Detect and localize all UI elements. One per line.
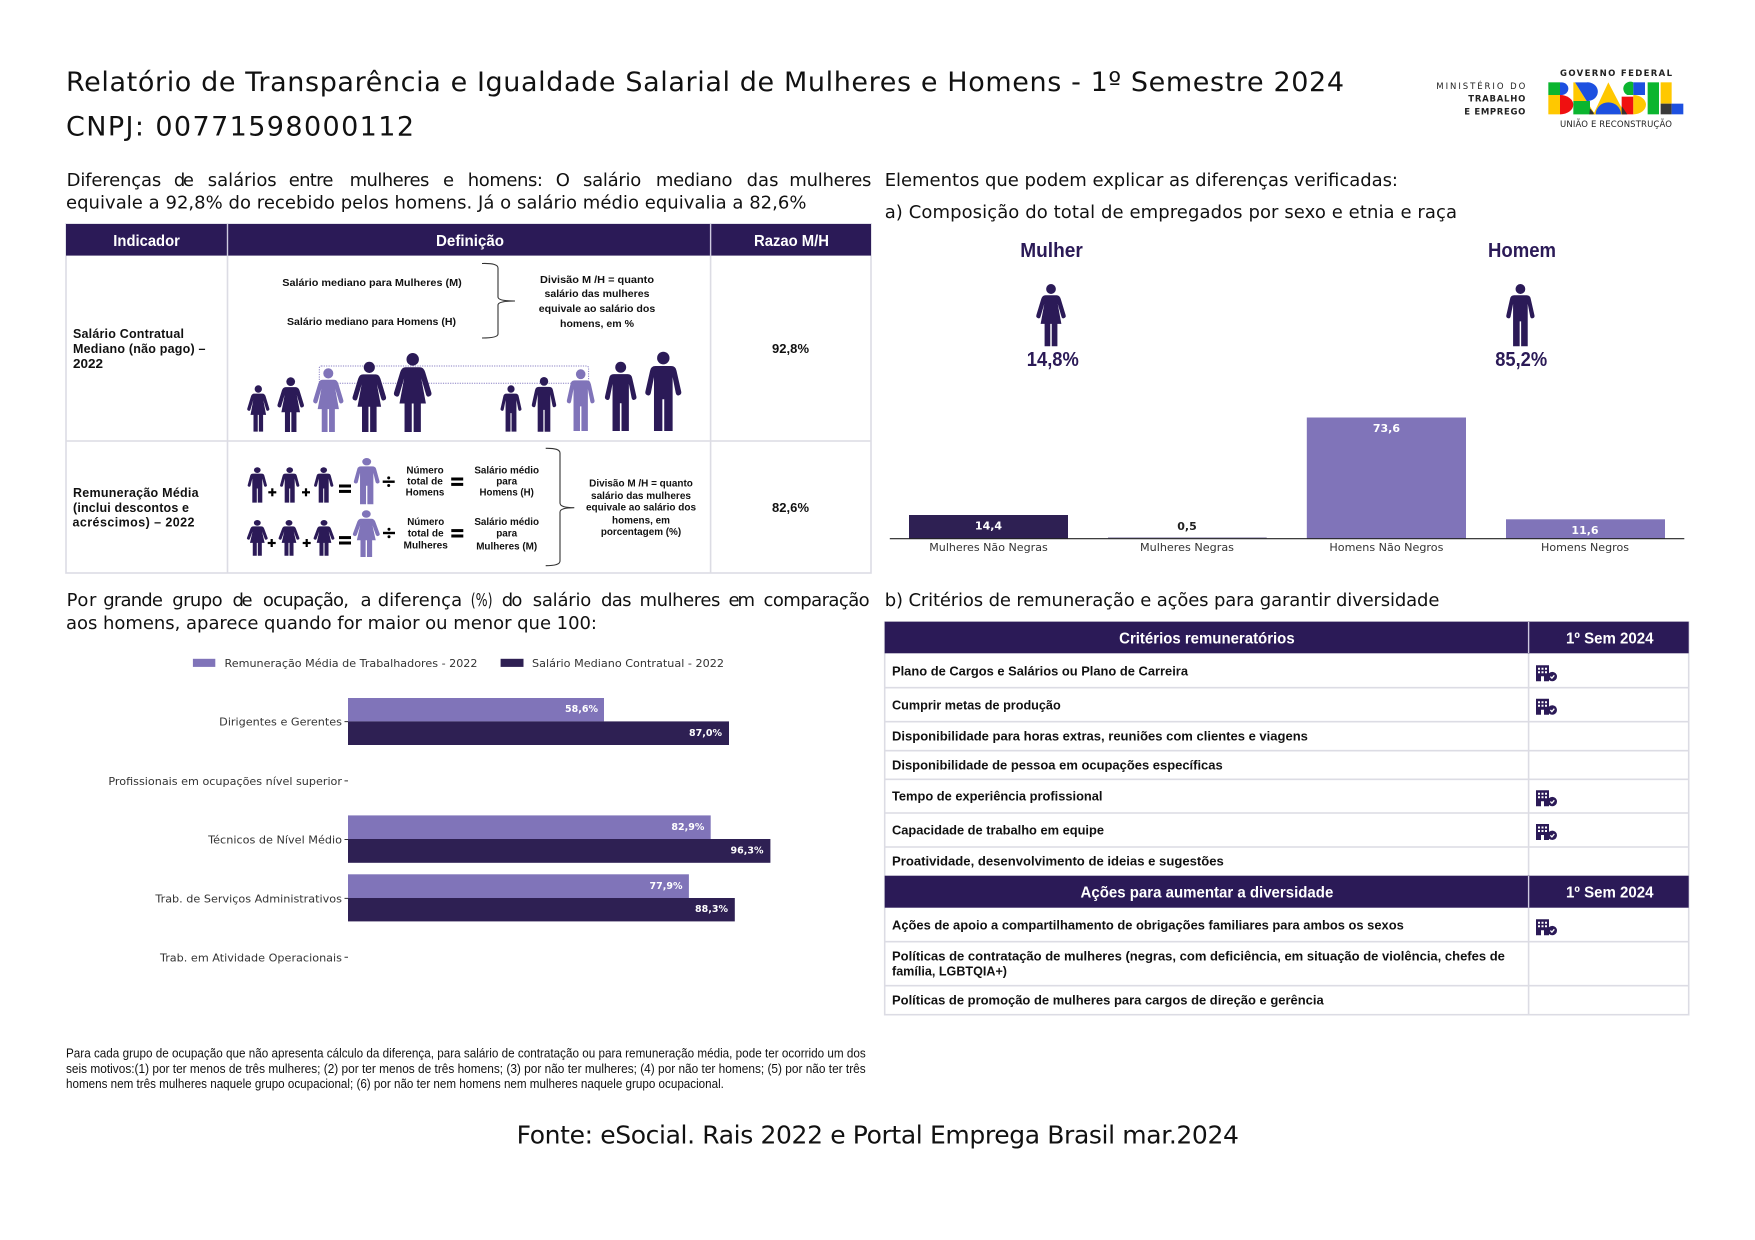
chart: employees by sex and race (890, 418, 1684, 554)
intro paragraph: salary differences: salário (583, 170, 641, 191)
median formula text (282, 277, 462, 328)
man share: Homem (1488, 240, 1556, 262)
row label: contract salary (73, 327, 206, 371)
government mark (1548, 69, 1683, 130)
average division explanation: homens, em (612, 514, 670, 526)
occupation paragraph: a (360, 590, 372, 611)
occupation paragraph: grande (103, 590, 163, 611)
bars: Trab. de Serviços Administrativos: 88,3% (695, 904, 728, 915)
table frame (66, 224, 871, 573)
median formula text: Salário mediano para Homens (H) (287, 316, 456, 328)
diversity rows: Políticas de promoção de mulheres para cargos de direção e gerência (892, 994, 1325, 1008)
row label: contract salary: Mediano (não pago) – (73, 342, 206, 356)
bars: Técnicos de Nível Médio: 96,3% (731, 846, 764, 857)
criteria rows: Cumprir metas de produção (892, 699, 1061, 713)
bar: Homens Negros: Homens Negros (1541, 541, 1629, 554)
occupation paragraph: Por (67, 590, 97, 611)
category labels: Técnicos de Nível Médio (207, 834, 342, 846)
formula: men average (248, 458, 539, 504)
category labels (108, 716, 348, 964)
criteria rows (892, 665, 1308, 869)
table header (66, 224, 871, 256)
bar: Mulheres Não Negras: Mulheres Não Negras (929, 541, 1048, 554)
table header: Razao M/H (754, 233, 829, 250)
median division explanation: homens, em % (560, 318, 635, 330)
median division explanation (539, 274, 655, 330)
footnote: homens nem três mulheres naquele grupo ocupacional; (6) por não ter nem homens nem mulheres naquele grupo ocupacional. (66, 1077, 724, 1091)
page title: Relatório de Transparência e Igualdade Salarial de Mulheres e Homens - 1º Semestre 2024 (66, 67, 1344, 98)
ratio values: 92,8% (772, 341, 809, 356)
bracket: average (546, 448, 574, 566)
intro paragraph: salary differences: entre (289, 170, 334, 191)
formula: women average: Salário médio (474, 516, 539, 528)
bar: Homens Negros (1506, 519, 1665, 554)
diversity rows: Ações de apoio a compartilhamento de obrigações familiares para ambos os sexos (892, 919, 1404, 933)
criteria rows: Disponibilidade para horas extras, reuniões com clientes e viagens (892, 730, 1308, 744)
footnote: seis motivos:(1) por ter menos de três mulheres; (2) por ter menos de três homens; (3) por não ter mulheres; (4) por não ter homens; (5) por não ter três (66, 1062, 866, 1076)
section heading a: a) Composição do total de empregados por sexo e etnia e raça (885, 202, 1457, 223)
category labels: Profissionais em ocupações nível superior (108, 775, 342, 788)
intro paragraph: salary differences (66, 170, 871, 214)
category labels: Dirigentes e Gerentes (219, 716, 342, 729)
criteria rows: Disponibilidade de pessoa em ocupações específicas (892, 759, 1223, 773)
panel: criteria table (885, 622, 1689, 1015)
formula: women average: Mulheres (M) (476, 540, 537, 552)
bar: Mulheres Negras: Mulheres Negras (1140, 541, 1234, 554)
bar: Mulheres Não Negras (909, 515, 1068, 554)
icons: women sorted by salary (247, 353, 432, 432)
ministry name (1436, 80, 1526, 117)
bars: Dirigentes e Gerentes (348, 698, 729, 745)
man share: 85,2% (1495, 349, 1547, 371)
header: criteria (885, 622, 1689, 653)
formula: women average: Número (407, 516, 444, 528)
intro paragraph: salary differences: mulheres (789, 170, 871, 191)
page title (66, 67, 1344, 142)
table header: Indicador (113, 233, 180, 250)
median division explanation: salário das mulheres (544, 288, 650, 300)
median formula text: Salário mediano para Mulheres (M) (282, 277, 462, 289)
header: diversity actions: Ações para aumentar a diversidade (1080, 884, 1333, 901)
bar: Homens Não Negros: 73,6 (1373, 422, 1400, 435)
bracket: median (482, 263, 515, 338)
bar: Mulheres Não Negras: 14,4 (975, 519, 1002, 532)
intro paragraph: salary differences: equivale a 92,8% do recebido pelos homens. Já o salário médio equivalia a 82,6% (66, 193, 806, 214)
formula: men average: Número (406, 464, 444, 476)
occupation paragraph: em (728, 590, 755, 611)
bar: Homens Não Negros (1307, 418, 1466, 554)
intro paragraph: salary differences: salários (208, 170, 277, 191)
occupation paragraph: aos homens, aparece quando for maior ou menor que 100: (66, 613, 597, 634)
bar: Homens Não Negros: Homens Não Negros (1329, 541, 1444, 554)
formula: men average: Homens (H) (480, 487, 534, 499)
intro paragraph: salary differences: mediano (656, 170, 732, 191)
median division explanation: equivale ao salário dos (539, 303, 655, 315)
logo: ministry and government (1436, 69, 1683, 130)
row label: average pay: (inclui descontos e (73, 501, 189, 515)
bars: Dirigentes e Gerentes: 58,6% (565, 704, 598, 715)
icons: criteria adopted (1536, 665, 1557, 840)
average division explanation: equivale ao salário dos (586, 502, 696, 514)
footnote (66, 1047, 866, 1091)
criteria rows: Capacidade de trabalho em equipe (892, 824, 1104, 838)
average division explanation: salário das mulheres (591, 490, 691, 502)
woman share: 14,8% (1027, 349, 1079, 371)
header: diversity actions (885, 876, 1689, 908)
diversity rows: família, LGBTQIA+) (892, 965, 1007, 979)
category labels: Trab. em Atividade Operacionais (159, 951, 342, 964)
footnote: Para cada grupo de ocupação que não apresenta cálculo da diferença, para salário de contratação ou para remuneração média, pode ter ocorrido um dos (66, 1047, 866, 1061)
bars: Trab. de Serviços Administrativos (348, 874, 735, 921)
panel: gender composition (1020, 240, 1556, 371)
bars: Dirigentes e Gerentes: 87,0% (689, 728, 722, 739)
bar: Homens Negros: 11,6 (1571, 524, 1599, 537)
occupation paragraph: das (601, 590, 632, 611)
occupation paragraph: mulheres (640, 590, 720, 611)
section heading b: b) Critérios de remuneração e ações para garantir diversidade (885, 590, 1439, 611)
intro paragraph: salary differences: Diferenças (67, 170, 161, 191)
average division explanation (586, 478, 696, 538)
criteria rows: Tempo de experiência profissional (892, 790, 1102, 804)
header: diversity actions: 1º Sem 2024 (1566, 884, 1654, 901)
row label: contract salary: 2022 (73, 357, 103, 371)
right column intro heading: Elementos que podem explicar as diferenças verificadas: (885, 170, 1398, 191)
diversity rows: Políticas de contratação de mulheres (negras, com deficiência, em situação de violência, chefes de (892, 950, 1505, 964)
panel: indicator table (66, 224, 871, 573)
formula: women average: Mulheres (404, 539, 448, 551)
government mark: UNIÃO E RECONSTRUÇÃO (1560, 119, 1672, 130)
ratio values: 82,6% (772, 500, 809, 515)
legend: Salário Mediano Contratual - 2022 (532, 657, 724, 670)
bar: Mulheres Negras (1108, 520, 1267, 554)
average division explanation: Divisão M /H = quanto (589, 478, 693, 490)
woman share (1020, 240, 1083, 371)
category labels: Trab. de Serviços Administrativos (154, 892, 342, 905)
criteria rows: Proatividade, desenvolvimento de ideias e sugestões (892, 855, 1224, 869)
row label: contract salary: Salário Contratual (73, 327, 184, 341)
formula: women average: para (496, 528, 517, 540)
ratio values (772, 341, 809, 515)
formula: men average: Homens (406, 487, 444, 499)
header: criteria: 1º Sem 2024 (1566, 630, 1654, 647)
icon: action adopted (1536, 919, 1557, 935)
legend (193, 657, 724, 670)
legend: Remuneração Média de Trabalhadores - 2022 (224, 657, 478, 670)
occupation paragraph: do (502, 590, 522, 611)
man share (1488, 240, 1556, 371)
occupation paragraph: de (232, 590, 253, 611)
occupation paragraph: ocupação, (263, 590, 349, 611)
woman share: Mulher (1020, 240, 1083, 262)
occupation paragraph: salário (533, 590, 591, 611)
formula: men average: total de (407, 476, 443, 488)
occupation paragraph: grupo (172, 590, 223, 611)
intro paragraph: salary differences: O (556, 170, 570, 191)
formula: women average: total de (408, 528, 444, 540)
bars: Trab. de Serviços Administrativos: 77,9% (650, 881, 683, 892)
row label: average pay: acréscimos) – 2022 (72, 516, 195, 530)
occupation paragraph: diferença (378, 590, 462, 611)
formula: men average: para (496, 476, 517, 488)
median division explanation: Divisão M /H = quanto (540, 274, 654, 286)
chart: pay ratio by occupation group (108, 657, 770, 964)
page title: CNPJ: 00771598000112 (66, 112, 414, 142)
government mark: GOVERNO FEDERAL (1560, 69, 1673, 79)
bar: Mulheres Negras: 0,5 (1177, 520, 1197, 533)
table grid (885, 622, 1689, 1015)
table header: Definição (436, 233, 504, 250)
intro paragraph: salary differences: e (443, 170, 454, 191)
bars: Técnicos de Nível Médio: 82,9% (671, 822, 705, 833)
occupation paragraph: comparação (764, 590, 870, 611)
formula: men average: Salário médio (474, 464, 539, 476)
formula: women average (247, 510, 539, 557)
row label: average pay: Remuneração Média (73, 486, 200, 500)
occupation paragraph: (%) (471, 590, 492, 611)
average division explanation: porcentagem (%) (601, 526, 681, 538)
icons: men sorted by salary (501, 352, 681, 432)
intro paragraph: salary differences: mulheres (350, 170, 429, 191)
row label: average pay (72, 486, 200, 530)
intro paragraph: salary differences: homens: (468, 170, 543, 191)
criteria rows: Plano de Cargos e Salários ou Plano de Carreira (892, 665, 1189, 679)
header: criteria: Critérios remuneratórios (1119, 630, 1295, 647)
ministry name: E EMPREGO (1464, 107, 1525, 117)
diversity rows (892, 919, 1505, 1008)
source line: Fonte: eSocial. Rais 2022 e Portal Emprega Brasil mar.2024 (517, 1120, 1239, 1149)
x axis (890, 538, 1684, 540)
occupation paragraph (66, 590, 870, 634)
ministry name: MINISTÉRIO DO (1436, 80, 1526, 92)
bars: Técnicos de Nível Médio (348, 815, 770, 863)
dotted median highlight (319, 366, 589, 383)
intro paragraph: salary differences: das (747, 170, 778, 191)
ministry name: TRABALHO (1468, 95, 1525, 105)
intro paragraph: salary differences: de (174, 170, 194, 191)
